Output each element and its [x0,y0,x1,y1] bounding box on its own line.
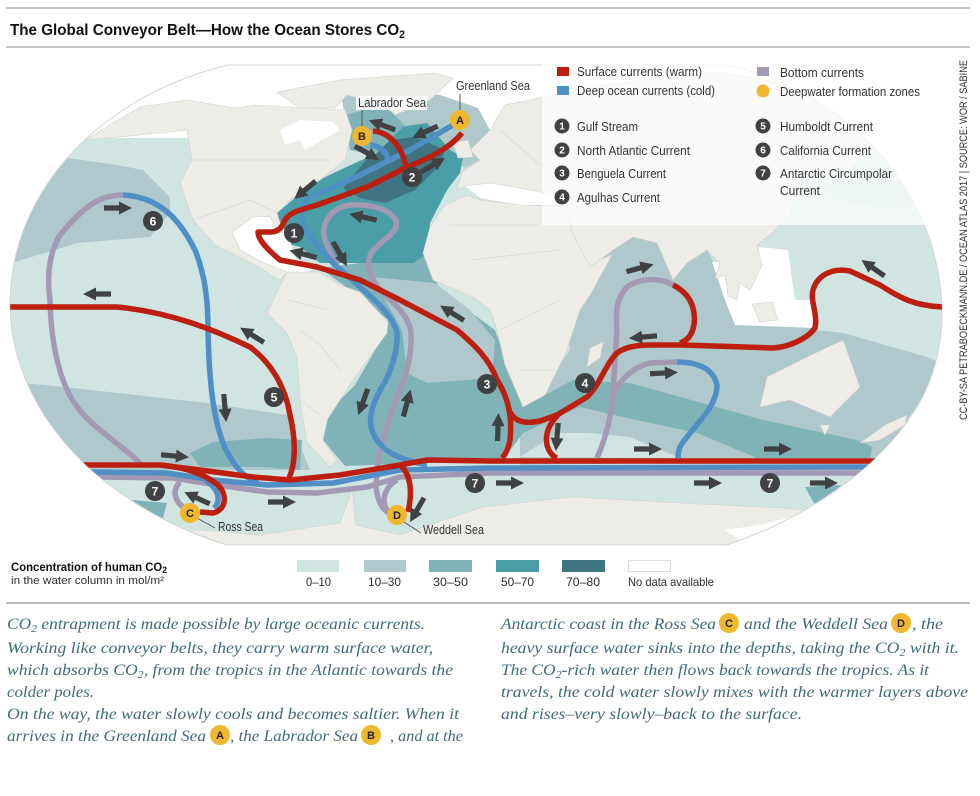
body text: right column: The CO [501,662,551,679]
legend: current types: Deep ocean currents (cold) [577,83,715,98]
ocean currents [0,125,943,514]
concentration legend: in the water column in mol/m² [11,575,164,587]
numbered current markers: 2 [409,170,416,184]
Hudson Bay [280,120,340,150]
bottom currents [0,195,878,514]
legend: current types: Surface currents (warm) [577,64,702,79]
numbered current markers: 1 [291,226,298,240]
world map panel [0,65,980,560]
body text: left column: which absorbs CO [7,662,126,679]
country borders [192,130,560,415]
legend: named currents: Benguela Current [577,166,666,181]
legend: current types: Bottom currents [780,65,864,80]
body text: left column: On the way, the water slowly cools and becomes saltier. When it [7,706,460,723]
legend: named currents: 5 [760,122,766,132]
legend: named currents: 1 [559,122,565,132]
legend: current types: Deepwater formation zones [780,84,920,99]
numbered current markers: 3 [484,378,491,392]
body text: right column: and the Weddell Sea [744,616,888,633]
numbered current markers [143,167,780,501]
body text: right column: , the [912,616,943,633]
legend: named currents: Current [780,183,820,198]
body text: left column: B [367,730,375,742]
land masses [86,72,908,544]
no-data white areas [230,183,815,328]
map outline [10,65,942,545]
numbered current markers: 4 [582,376,589,390]
concentration legend: No data available [628,575,714,589]
concentration legend: 50–70 [501,575,534,589]
legend: named currents: California Current [780,143,871,158]
body text: left column: Working like conveyor belts, they carry warm surface water, [7,640,433,657]
body text: right column: travels, the cold water slowly mixes with the warmer layers above [501,684,968,701]
body text: right column: 2 [899,647,906,659]
title: The Global Conveyor Belt—How the Ocean Stores CO [10,22,420,39]
legend: named currents: 6 [760,146,766,156]
body text: right column: C [725,618,733,630]
title: 2 [399,29,405,41]
body text: left column: entrapment is made possible by large oceanic currents. [37,616,425,633]
legend: named currents [554,118,893,205]
legend: named currents: Humboldt Current [780,119,873,134]
sea labels: Greenland Sea [456,78,531,93]
legend: named currents: 3 [559,168,565,180]
legend: named currents: 4 [559,192,565,204]
legend: named currents: 2 [559,146,565,156]
numbered current markers: 6 [150,214,157,228]
body text: left column: colder poles. [7,684,94,701]
legend: named currents: Antarctic Circumpolar [780,166,893,181]
legend: named currents: Gulf Stream [577,119,638,134]
numbered current markers: 7 [152,484,159,498]
body text: right column: 2 [556,669,562,681]
numbered current markers: 5 [271,390,278,404]
body text: right column: -rich water then flows back towards the tropics. As it [562,662,930,679]
body text: right column: and rises–very slowly–back to the surface. [501,706,802,723]
body text: left column: , the Labrador Sea [230,728,358,745]
deepwater formation zone markers: B [358,131,366,143]
deepwater formation zone markers: D [393,510,401,522]
body text: left column: 2 [31,623,38,635]
legend backdrop [542,60,942,225]
body text: right column: Antarctic coast in the Ross Sea [500,616,716,633]
body text: left column [7,616,463,745]
concentration legend: 70–80 [566,575,600,589]
concentration legend: 30–50 [433,575,468,589]
deepwater formation zone markers: C [186,508,194,520]
legend: named currents: 7 [760,168,766,180]
body text: left column: arrives in the Greenland Sea [7,728,206,745]
numbered current markers: 7 [767,476,774,490]
sea labels: Weddell Sea [423,522,485,537]
deepwater formation zone markers: A [456,115,464,127]
body text: right column: heavy surface water sinks into the depths, taking the CO [501,640,862,657]
concentration legend: 0–10 [306,575,331,589]
body text: left column: , and at the [390,728,463,745]
legend: current types [557,64,920,99]
sea labels [218,78,531,537]
legend: named currents: North Atlantic Current [577,143,690,158]
concentration legend: Concentration of human CO [11,560,171,574]
concentration legend: 10–30 [368,575,401,589]
ocean concentration zones [0,87,980,548]
body text: left column: 2 [138,669,144,681]
body text: right column: with it. [905,640,959,657]
concentration legend: 2 [162,565,167,575]
body text: right column: D [897,618,905,630]
source credit: CC-BY-SA PETRABOECKMANN.DE / OCEAN ATLAS 2017 | SOURCE: WOR / SABINE [958,60,970,420]
white ice patches [726,518,790,540]
body text: left column: CO [7,616,29,633]
body text: left column: , from the tropics in the Atlantic towards the [144,662,453,679]
body text: left column: A [216,730,224,742]
sea labels: Ross Sea [218,519,264,534]
surface currents [10,131,943,513]
deepwater formation zone markers [180,94,470,533]
concentration legend [11,560,714,589]
deep ocean currents [90,125,870,508]
direction arrows [83,114,888,525]
legend: named currents: Agulhas Current [577,190,660,205]
body text: right column [500,613,968,723]
sea labels: Labrador Sea [358,95,427,110]
numbered current markers: 7 [472,476,479,490]
